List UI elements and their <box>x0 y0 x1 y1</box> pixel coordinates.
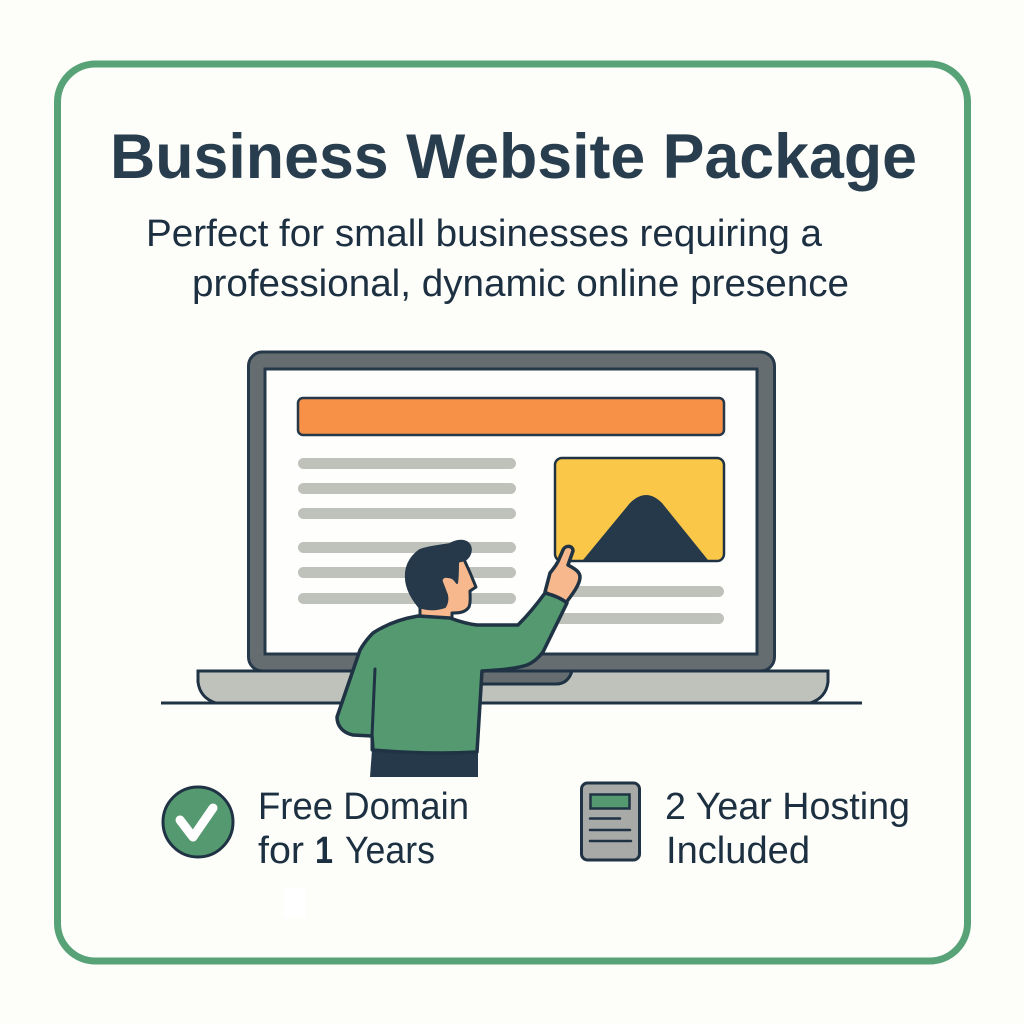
ground line <box>161 702 862 704</box>
feature: free domain <box>163 786 469 872</box>
laptop base <box>198 671 828 703</box>
hair <box>406 541 471 609</box>
image placeholder <box>555 458 724 561</box>
free domain text: Free Domain <box>258 786 469 828</box>
free domain text: Years <box>345 830 435 872</box>
neck and face <box>420 555 476 619</box>
hosting text: Included <box>666 830 810 872</box>
free domain text <box>258 786 469 872</box>
hosting text: 2 Year Hosting <box>665 786 910 828</box>
laptop notch <box>450 671 572 684</box>
panel: card frame <box>58 64 968 961</box>
title: Business Website Package <box>110 122 917 192</box>
illustration: person pointing <box>337 541 580 777</box>
sleeve line <box>372 669 375 750</box>
illustration: laptop <box>161 352 862 703</box>
text lines left <box>298 458 516 604</box>
sweater <box>337 593 567 753</box>
text lines right <box>555 586 724 624</box>
free domain text: for <box>258 830 304 872</box>
laptop screen <box>265 369 757 654</box>
white square artifact <box>284 888 306 918</box>
icon: check badge <box>163 787 233 857</box>
hosting text <box>665 786 910 872</box>
hand <box>545 546 580 604</box>
icon: server document <box>582 783 640 860</box>
subtitle: professional, dynamic online presence <box>192 263 849 305</box>
subtitle <box>146 213 849 305</box>
subtitle: Perfect for small businesses requiring a <box>146 213 823 255</box>
trousers <box>370 750 478 777</box>
laptop lid <box>248 352 774 671</box>
orange header bar <box>298 398 724 435</box>
free domain text: 1 <box>315 830 333 872</box>
feature: hosting <box>582 783 910 872</box>
